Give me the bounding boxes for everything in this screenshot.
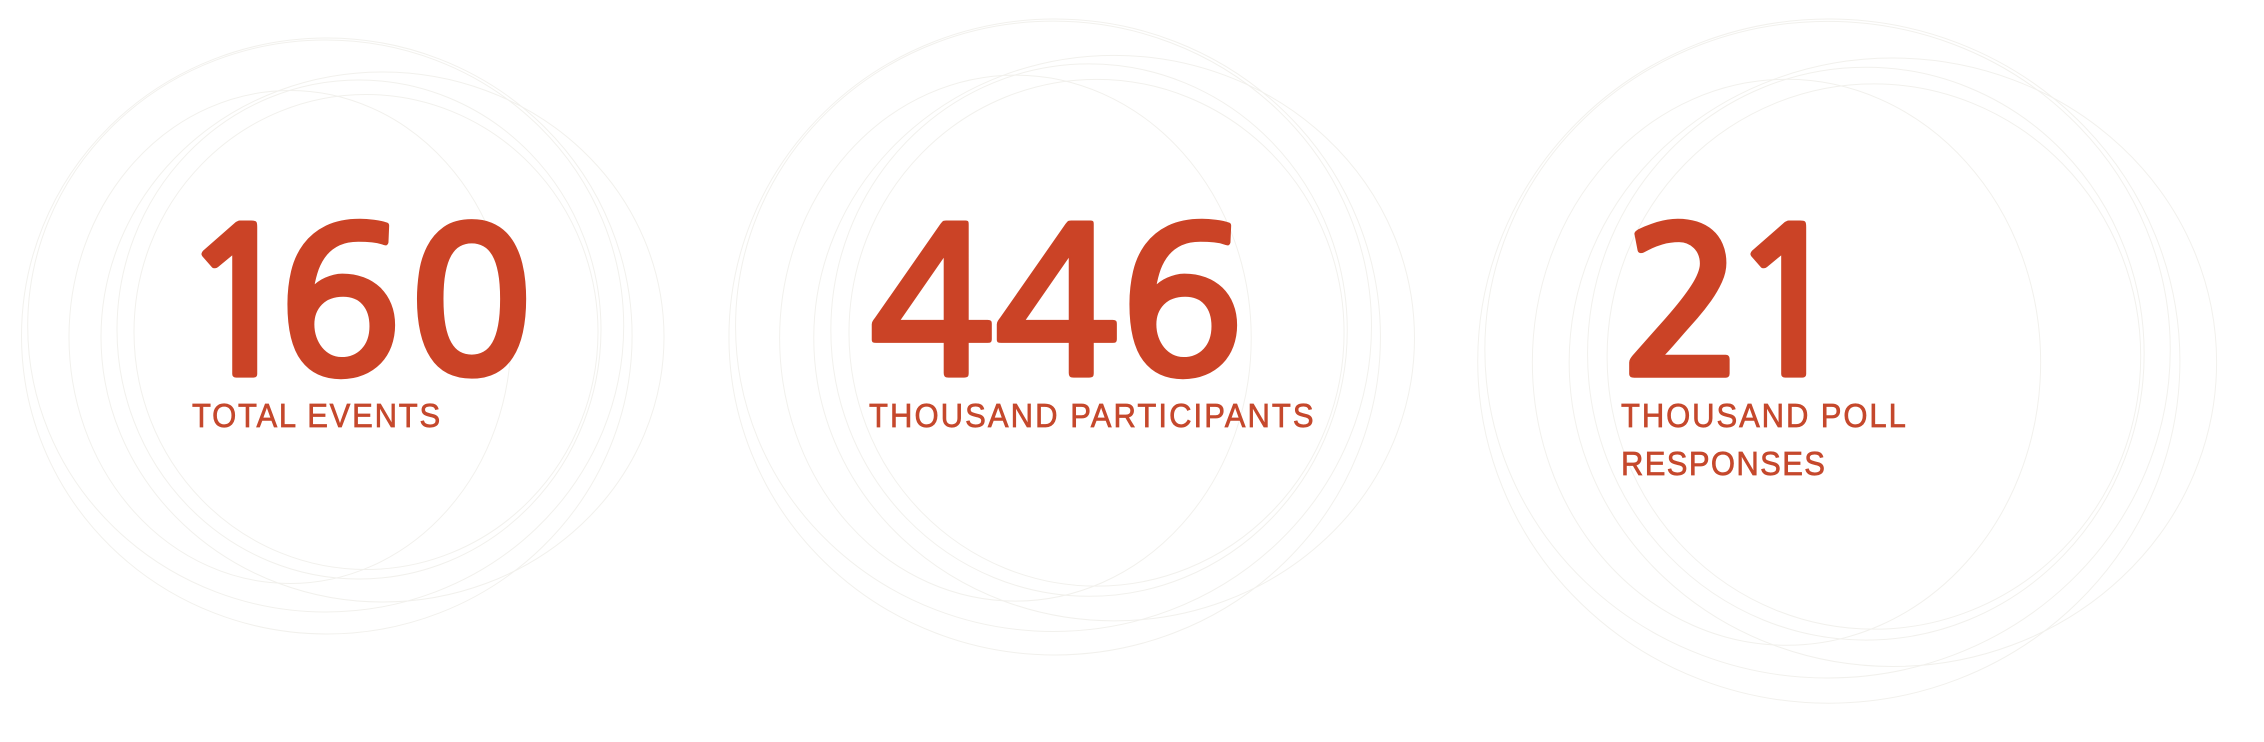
number: 21: 21 <box>1618 205 1854 407</box>
number: 160: 160 <box>175 205 536 407</box>
label: total events: TOTAL EVENTS <box>192 397 440 434</box>
panel: thousand participants <box>729 19 1414 655</box>
label: thousand poll responses: RESPONSES <box>1621 445 1825 482</box>
label: thousand participants: THOUSAND PARTICIPANTS <box>869 397 1314 434</box>
decorative rings: total events <box>22 38 664 634</box>
panel: total events <box>22 38 664 634</box>
decorative rings: thousand poll responses <box>1478 19 2217 703</box>
decorative rings: thousand participants <box>729 19 1414 655</box>
panel: thousand poll responses <box>1478 19 2217 703</box>
number: 446: 446 <box>867 205 1247 407</box>
label: thousand poll responses: THOUSAND POLL <box>1621 397 1906 434</box>
